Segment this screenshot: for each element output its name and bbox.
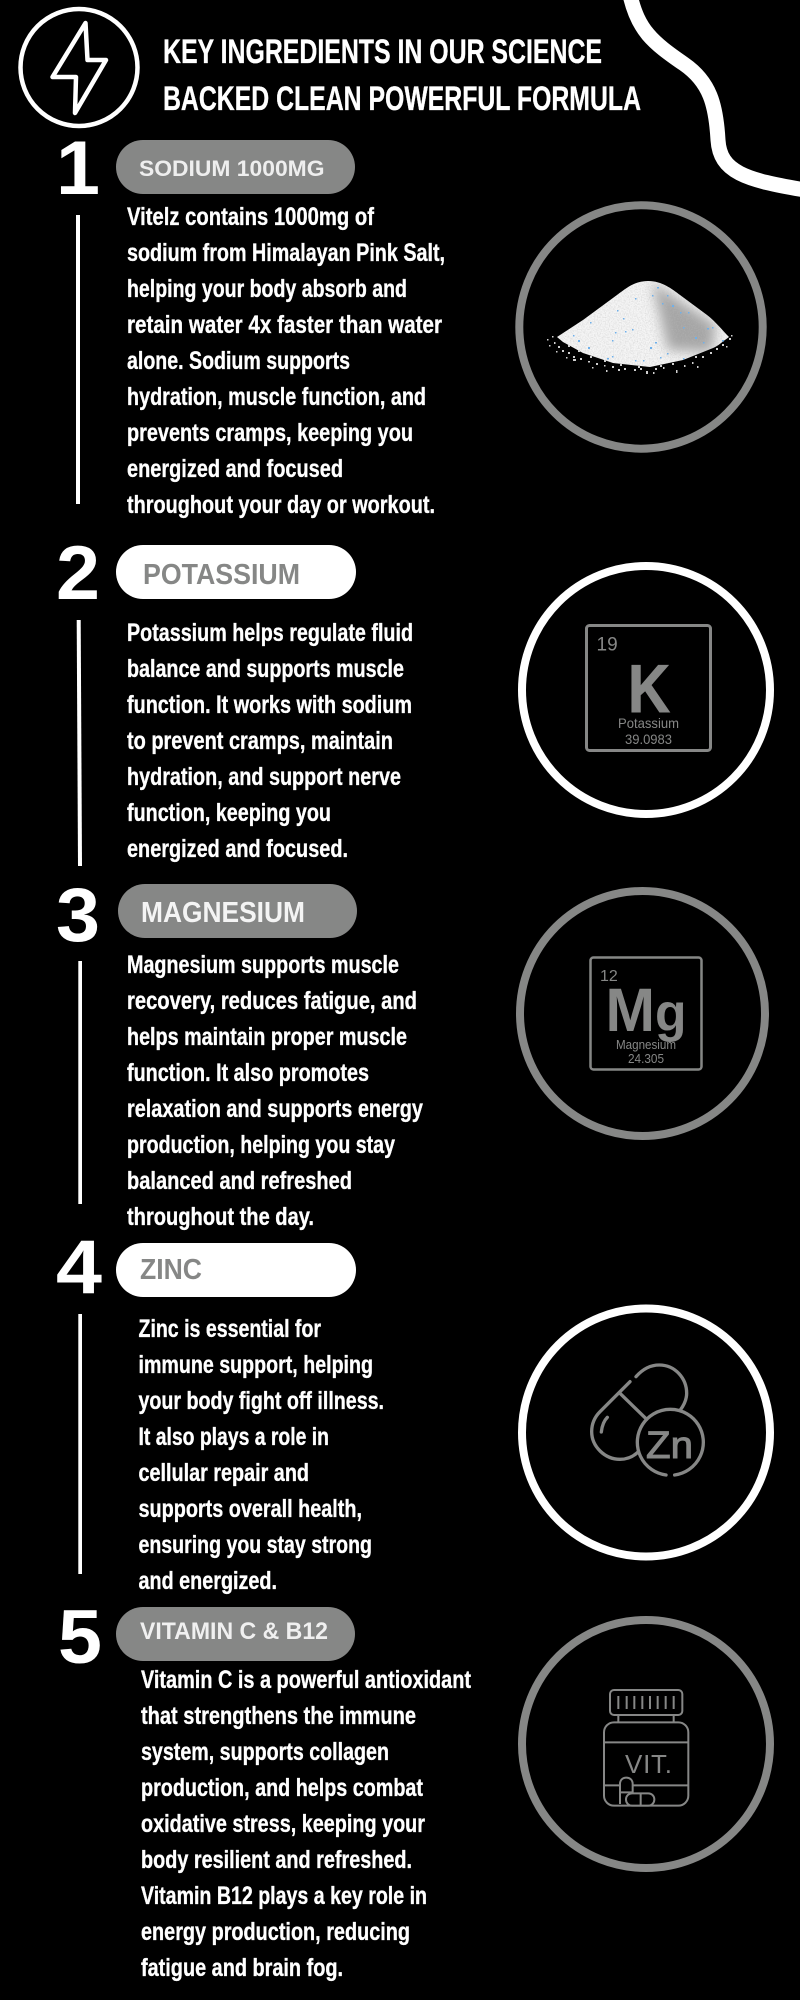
- text: zinc description: your body fight off illness.: [138, 1387, 384, 1415]
- text: vitamin description: production, and helps combat: [141, 1774, 424, 1802]
- text: vitamin description: body resilient and refreshed.: [141, 1846, 412, 1874]
- title: BACKED CLEAN POWERFUL FORMULA: [163, 80, 641, 118]
- text: potassium description: energized and focused.: [127, 835, 348, 863]
- text: magnesium description: Magnesium supports muscle: [127, 951, 399, 979]
- text: zinc description: Zinc is essential for: [138, 1315, 321, 1343]
- icon: zinc capsule in white circle: Zn: [646, 1425, 693, 1467]
- icon: magnesium element tile in grey circle: 12: [600, 968, 618, 985]
- timeline line 1: [76, 215, 80, 504]
- text: sodium description: Vitelz contains 1000mg of: [127, 203, 375, 231]
- text: magnesium description: [127, 951, 423, 1231]
- text: vitamin description: energy production, reducing: [141, 1918, 410, 1946]
- text: vitamin description: system, supports collagen: [141, 1738, 389, 1766]
- text: vitamin description: Vitamin C is a powerful antioxidant: [141, 1666, 472, 1694]
- icon: salt pile in grey circle: [519, 205, 763, 449]
- text: magnesium description: helps maintain proper muscle: [127, 1023, 407, 1051]
- timeline line 2: [77, 620, 82, 866]
- text: potassium description: balance and supports muscle: [127, 655, 404, 683]
- icon: potassium element tile in white circle: 19: [596, 634, 618, 656]
- pill heading: potassium: POTASSIUM: [143, 559, 300, 591]
- icon: magnesium element tile in grey circle: [520, 891, 765, 1136]
- text: zinc description: ensuring you stay strong: [138, 1531, 372, 1559]
- decorative corner squiggle: [630, 0, 800, 190]
- text: magnesium description: function. It also promotes: [127, 1059, 369, 1087]
- text: sodium description: retain water 4x faster than water: [127, 311, 442, 339]
- text: potassium description: to prevent cramps, maintain: [127, 727, 393, 755]
- text: vitamin description: that strengthens the immune: [141, 1702, 416, 1730]
- text: sodium description: helping your body absorb and: [127, 275, 407, 303]
- text: magnesium description: balanced and refreshed: [127, 1167, 352, 1195]
- text: magnesium description: recovery, reduces fatigue, and: [127, 987, 417, 1015]
- pill heading: potassium: [116, 545, 356, 599]
- icon: lightning bolt in circle: [20, 9, 138, 126]
- icon: potassium element tile in white circle: K: [628, 651, 670, 727]
- text: sodium description: sodium from Himalayan Pink Salt,: [127, 239, 445, 267]
- icon: potassium element tile in white circle: [522, 566, 770, 814]
- text: magnesium description: throughout the day.: [127, 1203, 314, 1231]
- text: vitamin description: oxidative stress, keeping your: [141, 1810, 425, 1838]
- text: zinc description: and energized.: [138, 1567, 277, 1595]
- text: vitamin description: fatigue and brain fog.: [141, 1954, 343, 1982]
- icon: magnesium element tile in grey circle: Magnesium: [616, 1038, 676, 1052]
- pill heading: sodium: SODIUM 1000MG: [139, 156, 324, 181]
- number 2: 2: [56, 531, 100, 616]
- icon: potassium element tile in white circle: 39.0983: [625, 731, 672, 747]
- text: zinc description: It also plays a role in: [138, 1423, 329, 1451]
- icon: vitamin bottle in grey circle: VIT.: [625, 1749, 672, 1779]
- text: potassium description: function. It works with sodium: [127, 691, 412, 719]
- panel: ingredient 5 vitamin c and b12: [58, 1595, 770, 1982]
- icon: potassium element tile in white circle: Potassium: [618, 715, 679, 731]
- text: sodium description: prevents cramps, keeping you: [127, 419, 413, 447]
- text: zinc description: immune support, helping: [138, 1351, 373, 1379]
- text: potassium description: Potassium helps regulate fluid: [127, 619, 413, 647]
- number 1: 1: [56, 126, 100, 211]
- text: potassium description: function, keeping you: [127, 799, 331, 827]
- text: sodium description: energized and focused: [127, 455, 343, 483]
- pill heading: zinc: [116, 1243, 356, 1297]
- number 3: 3: [56, 873, 100, 958]
- timeline line 3: [78, 961, 82, 1204]
- icon: magnesium element tile in grey circle: Mg: [606, 976, 686, 1044]
- icon: magnesium element tile in grey circle: 24.305: [628, 1051, 664, 1066]
- pill heading: vitamin c and b12: [116, 1607, 355, 1661]
- pill heading: vitamin c and b12: VITAMIN C & B12: [140, 1618, 328, 1645]
- text: magnesium description: relaxation and supports energy: [127, 1095, 423, 1123]
- pill heading: magnesium: MAGNESIUM: [141, 897, 305, 929]
- panel: ingredient 1 sodium: [56, 126, 763, 519]
- panel: ingredient 3 magnesium: [56, 873, 765, 1231]
- text: magnesium description: production, helping you stay: [127, 1131, 395, 1159]
- text: zinc description: supports overall health,: [138, 1495, 362, 1523]
- pill heading: magnesium: [118, 884, 357, 938]
- text: sodium description: [127, 203, 445, 519]
- text: zinc description: [138, 1315, 384, 1595]
- text: sodium description: hydration, muscle function, and: [127, 383, 426, 411]
- text: potassium description: [127, 619, 413, 863]
- text: potassium description: hydration, and support nerve: [127, 763, 401, 791]
- pill heading: sodium: [116, 140, 355, 194]
- panel: ingredient 2 potassium: [56, 531, 770, 866]
- icon: vitamin bottle in grey circle: [522, 1620, 770, 1868]
- text: sodium description: alone. Sodium supports: [127, 347, 350, 375]
- number 4: 4: [56, 1225, 102, 1310]
- title: [163, 33, 641, 118]
- text: vitamin description: [141, 1666, 472, 1982]
- timeline line 4: [78, 1314, 82, 1574]
- text: zinc description: cellular repair and: [138, 1459, 309, 1487]
- text: vitamin description: Vitamin B12 plays a key role in: [141, 1882, 427, 1910]
- panel: ingredient 4 zinc: [56, 1225, 770, 1595]
- number 5: 5: [58, 1595, 102, 1680]
- pill heading: zinc: ZINC: [140, 1254, 202, 1286]
- title: KEY INGREDIENTS IN OUR SCIENCE: [163, 33, 602, 71]
- text: sodium description: throughout your day or workout.: [127, 491, 435, 519]
- icon: zinc capsule in white circle: [522, 1308, 770, 1556]
